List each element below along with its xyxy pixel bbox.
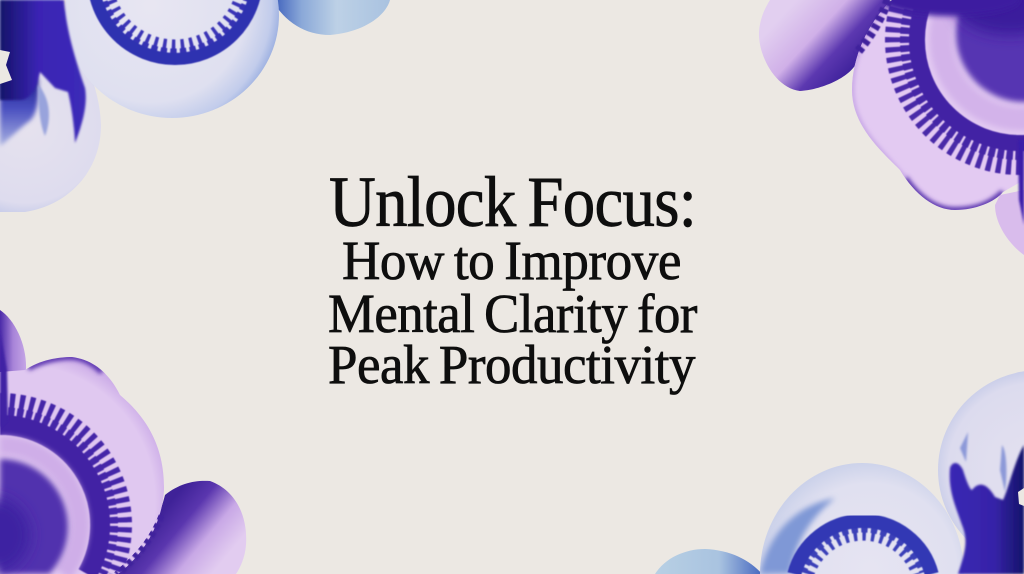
rim: soft left edge (852, 0, 905, 178)
decoration: top-left blue watercolor blobs (0, 0, 390, 212)
rim: dark top edge (28, 357, 102, 372)
ink wash: drips under streak (0, 78, 39, 146)
rim: dark lower edge (905, 178, 1003, 210)
subheading line: Mental Clarity for: Mental Clarity for (328, 283, 697, 344)
decoration: bottom-right blue watercolor blobs (655, 370, 1024, 574)
blob: small light-blue petal (655, 549, 762, 574)
ring: toothed blue ink ring (760, 498, 932, 574)
light inner ring (0, 445, 80, 574)
blob: left purple petal (759, 0, 890, 91)
ink: left edge streak (0, 330, 8, 428)
blob: middle pale petal (65, 0, 279, 118)
title block (328, 162, 697, 395)
teeth: edge of left petal (856, 0, 888, 54)
ink: lower right streak (1018, 140, 1024, 225)
blob: lower right petal (995, 190, 1024, 255)
light inner ring (941, 0, 1024, 119)
ink wash: faded drip (38, 85, 49, 136)
notch: cream gap in streak (0, 50, 12, 84)
decoration: top-right purple watercolor blobs (759, 0, 1024, 255)
ring: toothed purple ink ring and core (0, 357, 121, 574)
blob: small light-blue petal (272, 0, 390, 35)
blob: large purple petal (852, 0, 1024, 210)
blob: middle pale petal (760, 463, 964, 574)
ink streak: dark blue drip (950, 445, 1024, 574)
heading: Unlock Focus: Unlock Focus: (329, 162, 696, 242)
blob: large purple petal (0, 357, 164, 574)
blob: left pale petal (0, 0, 101, 212)
core (956, 0, 1024, 102)
core (0, 459, 68, 574)
notch: cream speck in streak (1018, 488, 1024, 506)
subheading line: Peak Productivity: Peak Productivity (328, 334, 696, 395)
subheading line: How to Improve: How to Improve (342, 230, 681, 291)
blob: top-left sliver petal (0, 310, 26, 400)
blob: right pale petal (938, 370, 1024, 570)
wash: blue tint left of ring (760, 498, 835, 574)
ring: toothed blue ink ring (93, 0, 257, 59)
ring: toothed purple ink ring and core (852, 0, 1024, 210)
ink wash: faded drips (960, 432, 1006, 492)
decoration: bottom-left purple watercolor blobs (0, 310, 246, 574)
ink streak: dark blue drip (0, 0, 86, 143)
teeth: edge of small petal (116, 515, 160, 574)
blob: small right petal (112, 481, 246, 574)
